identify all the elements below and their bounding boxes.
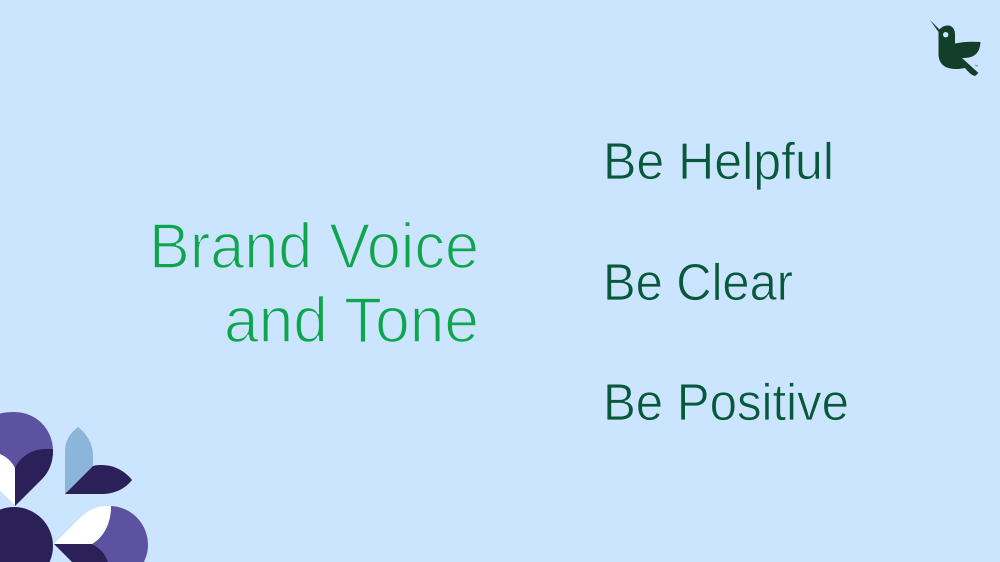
principle: be helpful: Be Helpful: [603, 133, 834, 191]
petal: purple top-left: [0, 412, 53, 506]
petal: white bottom: [54, 506, 111, 544]
title: Brand Voice: [149, 210, 479, 282]
petal: dark leaf: [65, 465, 132, 494]
petal: light blue: [65, 427, 93, 494]
principle: be clear: Be Clear: [603, 254, 793, 312]
petal: purple bottom-right: [92, 506, 148, 562]
petal: white top-left: [0, 454, 15, 506]
petal: dark top-left: [15, 449, 53, 506]
circle: dark bottom-left: [0, 507, 53, 562]
list of voice principles: [603, 133, 849, 432]
icon: hummingbird logo: ™: [974, 64, 978, 68]
icon: hummingbird logo: [930, 20, 980, 76]
petal: dark bottom: [54, 544, 108, 562]
principle: be positive: Be Positive: [603, 374, 849, 432]
title: [149, 210, 479, 356]
title: and Tone: [224, 284, 479, 356]
decorative petal cluster: [0, 412, 148, 562]
